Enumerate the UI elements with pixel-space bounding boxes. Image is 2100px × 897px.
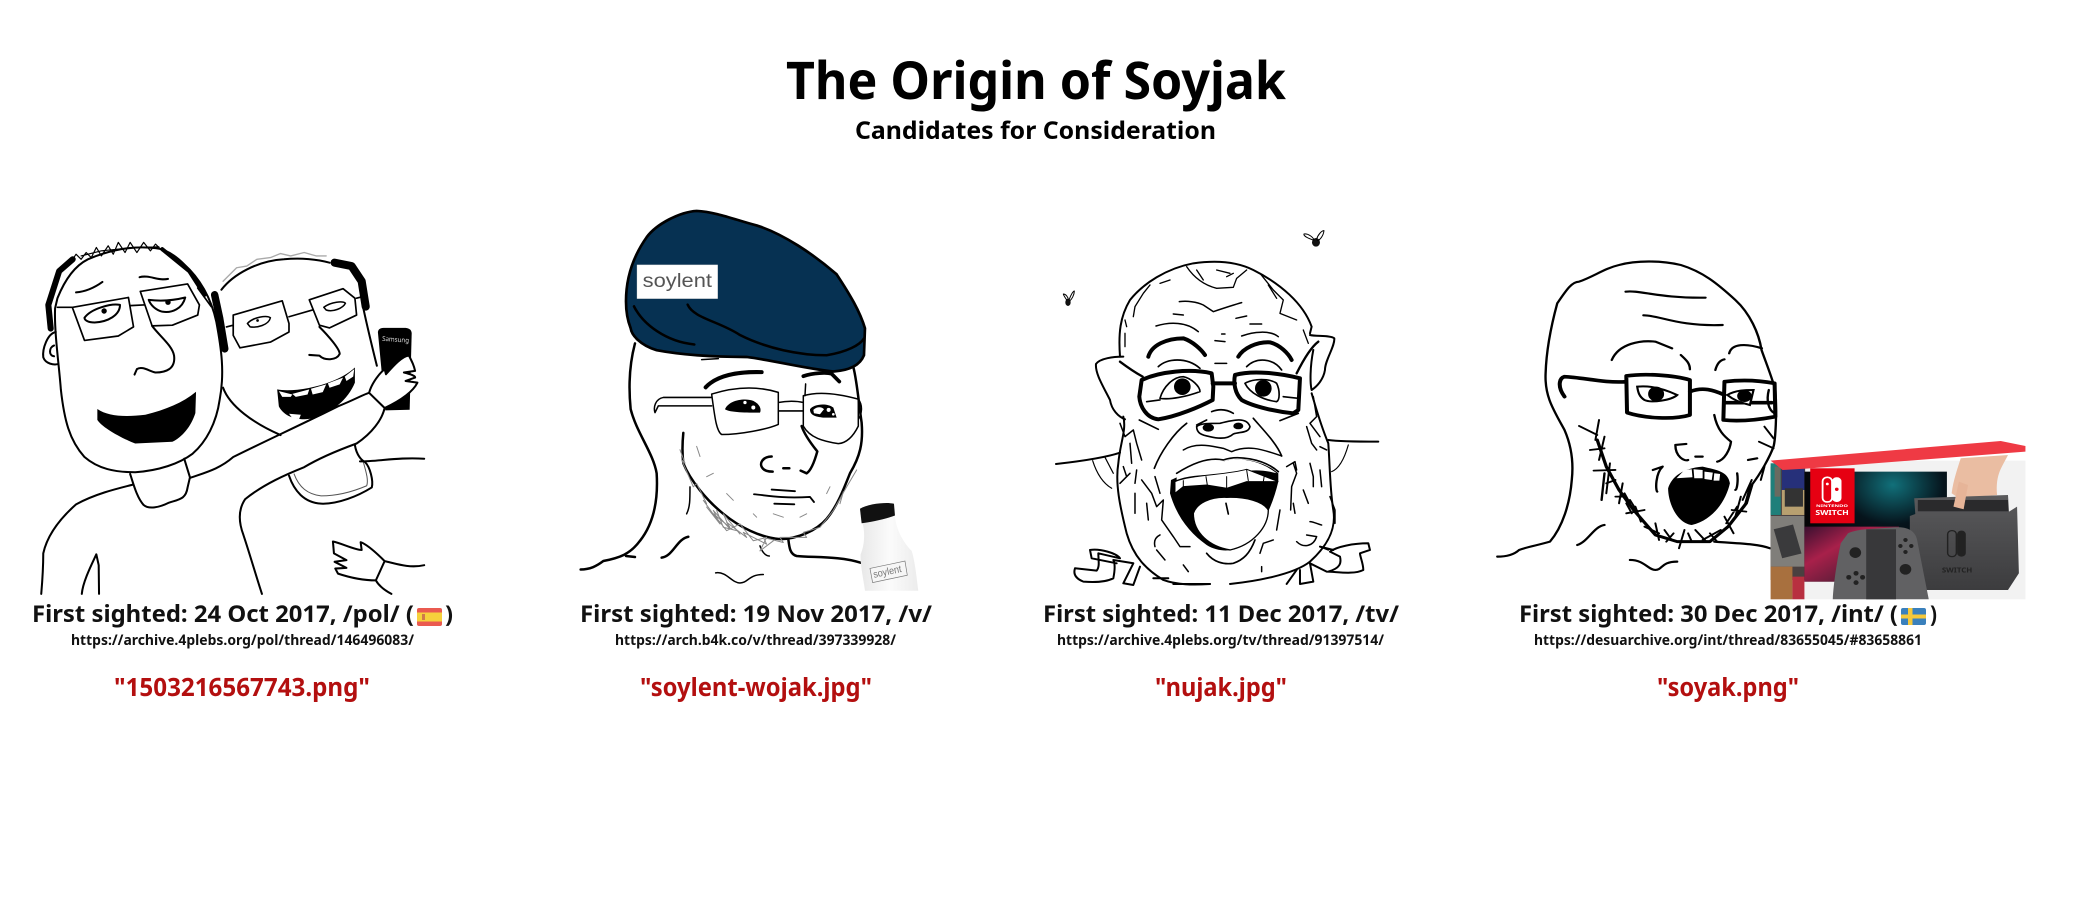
- file name: "soyak.png": [1657, 670, 1799, 704]
- beret: [626, 211, 865, 371]
- nintendo switch box: [1771, 441, 2025, 599]
- caption: first sighted: First sighted: 24 Oct 2017, /pol/ (: [32, 597, 414, 629]
- caption: first sighted: First sighted: 30 Dec 2017, /int/ (: [1519, 597, 1898, 629]
- soylent label: [637, 265, 718, 299]
- panel: candidate nujak: [1043, 231, 1399, 704]
- soylent bottle: soylent: [872, 564, 903, 581]
- source url: https://arch.b4k.co/v/thread/397339928/: [615, 630, 896, 650]
- icon: Sweden flag: [1901, 608, 1926, 625]
- caption: first sighted: First sighted: 11 Dec 2017, /tv/: [1043, 597, 1399, 629]
- nintendo switch box: SWITCH: [1815, 508, 1849, 518]
- drawing: bearded nujak face with flies: [1056, 231, 1378, 585]
- caption: closing parenthesis: ): [1930, 597, 1937, 629]
- icon: fly: [1304, 231, 1324, 247]
- source url: https://archive.4plebs.org/pol/thread/146496083/: [71, 630, 414, 650]
- panel: candidate soyak: [1497, 261, 2025, 704]
- caption: closing parenthesis: ): [445, 597, 453, 629]
- drawing: two men taking a selfie: [41, 242, 424, 594]
- file name: "1503216567743.png": [114, 670, 370, 704]
- drawing: two men taking a selfie: Samsung: [382, 334, 409, 345]
- subtitle: Candidates for Consideration: [855, 114, 1216, 147]
- drawing: open-mouthed soyak with bearded neck: [1497, 261, 2025, 599]
- source url: https://desuarchive.org/int/thread/83655045/#83658861: [1534, 630, 1922, 650]
- file name: "nujak.jpg": [1155, 670, 1287, 704]
- source url: https://archive.4plebs.org/tv/thread/91397514/: [1057, 630, 1384, 650]
- icon: Spain flag: [417, 608, 442, 626]
- caption: first sighted: First sighted: 19 Nov 2017, /v/: [580, 597, 932, 629]
- soylent label: soylent: [643, 270, 713, 292]
- panel: candidate 1503216567743: [32, 242, 453, 704]
- file name: "soylent-wojak.jpg": [640, 670, 872, 704]
- soylent bottle: [860, 503, 918, 591]
- nintendo switch box: NINTENDO: [1816, 504, 1848, 509]
- drawing: wojak in soylent beret with bottle: [581, 211, 918, 591]
- icon: fly: [1063, 291, 1074, 306]
- nintendo switch box: SWITCH: [1942, 566, 1972, 576]
- panel: candidate soylent-wojak: [580, 211, 932, 704]
- title: The Origin of Soyjak: [786, 44, 1287, 115]
